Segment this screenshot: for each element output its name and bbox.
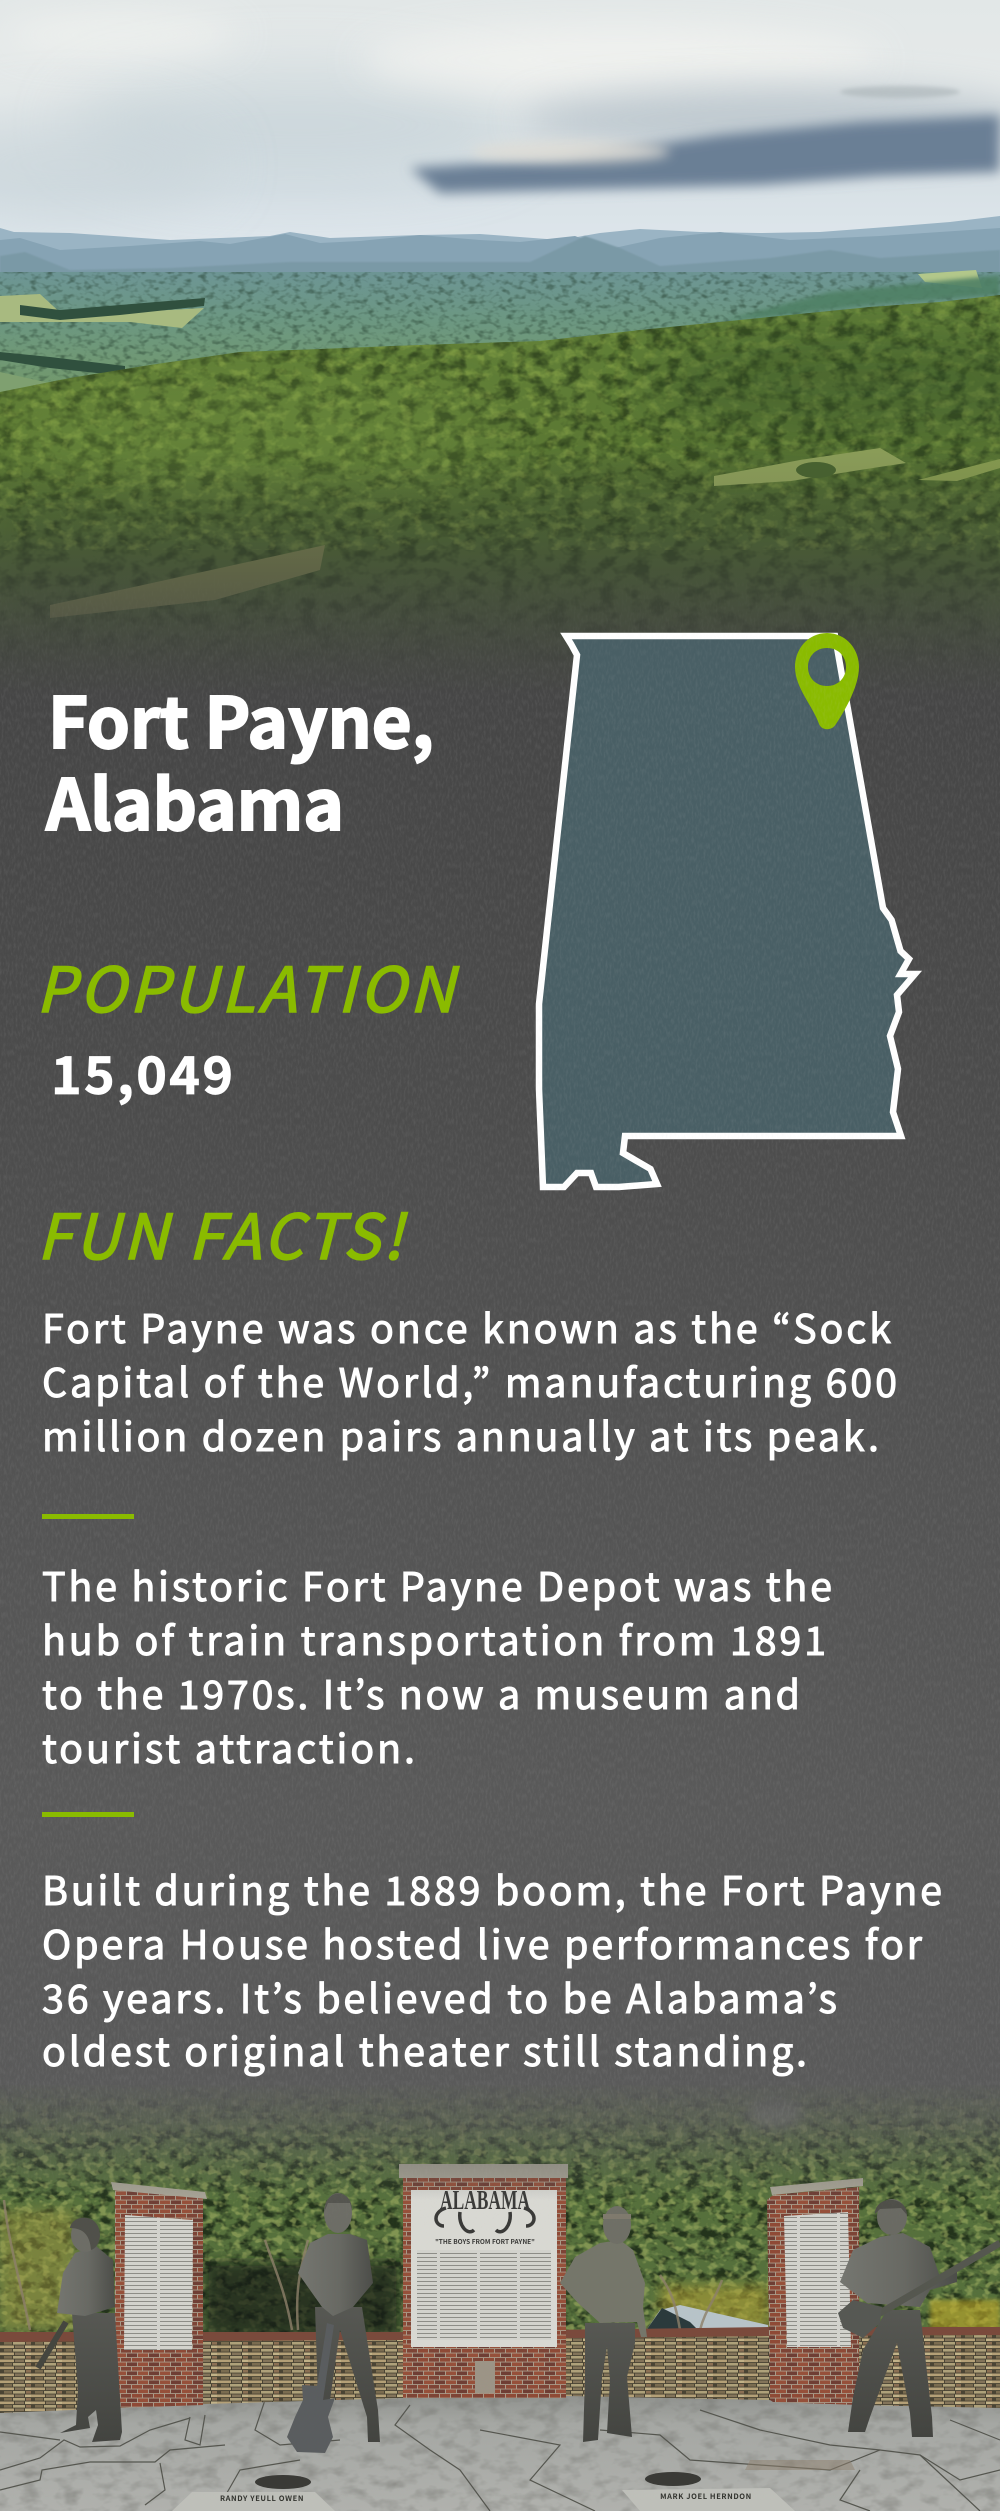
- statue: band member with bass guitar: [287, 2193, 380, 2453]
- valley forest and fields: [0, 270, 1000, 428]
- photo: Alabama band statues monument: [0, 2080, 1000, 2511]
- title: Alabama: [45, 750, 344, 851]
- statue: band member with headband: [560, 2206, 647, 2442]
- fact: sock capital: Fort Payne was once known as the “Sock: [42, 1298, 891, 1355]
- background: dark textured paper: [0, 560, 1000, 2240]
- heading: population: POPULATION: [36, 940, 459, 1030]
- fact: opera house: oldest original theater still standing.: [42, 2021, 807, 2078]
- meadows: [50, 448, 1000, 618]
- fact: sock capital: [42, 1298, 897, 1463]
- fade into dark background: [0, 2080, 1000, 2200]
- fade into dark background: [0, 450, 1000, 700]
- center brick pillar with Alabama plaque: [399, 2164, 568, 2398]
- icon: location pin: [795, 633, 859, 729]
- Alabama logo text: ALABAMA: [440, 2185, 530, 2215]
- heading: fun facts: FUN FACTS!: [37, 1187, 408, 1277]
- stone plaza: RANDY YEULL OWEN: [220, 2493, 304, 2504]
- distant mountains: [0, 216, 1000, 300]
- fact: opera house: Opera House hosted live performances for: [42, 1914, 923, 1971]
- fact: depot: [42, 1556, 832, 1775]
- fact: depot: tourist attraction.: [42, 1718, 415, 1775]
- sky with clouds: [0, 0, 1000, 240]
- stone plaza: MARK JOEL HERNDON: [660, 2491, 752, 2502]
- fact: sock capital: million dozen pairs annually at its peak.: [42, 1406, 879, 1463]
- forested hills: [0, 295, 1000, 642]
- population figure: 15,049: [51, 1034, 233, 1109]
- title: [45, 668, 434, 851]
- map: Alabama state outline: [539, 633, 915, 1187]
- fact: sock capital: Capital of the World,” manufacturing 600: [42, 1352, 897, 1409]
- stacked stone wall: [0, 2327, 1000, 2416]
- title: Fort Payne,: [48, 668, 434, 769]
- divider: [42, 1514, 134, 1519]
- stone plaza: [0, 2395, 1000, 2511]
- fact: opera house: 36 years. It’s believed to be Alabama’s: [42, 1968, 837, 2025]
- statue: band member with rifle-shaped prop, left: [38, 2218, 122, 2442]
- fact: opera house: [42, 1860, 942, 2078]
- fact: depot: hub of train transportation from 1891: [42, 1610, 826, 1667]
- fact: depot: to the 1970s. It’s now a museum and: [42, 1664, 800, 1721]
- photo: Fort Payne aerial landscape: [0, 0, 1000, 700]
- fact: depot: The historic Fort Payne Depot was the: [42, 1556, 832, 1613]
- fact: opera house: Built during the 1889 boom, the Fort Payne: [42, 1860, 942, 1917]
- tree backdrop: [0, 2085, 1000, 2345]
- left brick pillar with plaque: [111, 2182, 207, 2408]
- statue: guitarist on right: [838, 2199, 1000, 2437]
- right brick pillar with plaque: [767, 2178, 863, 2405]
- center brick pillar with Alabama plaque: "THE BOYS FROM FORT PAYNE": [435, 2236, 535, 2246]
- divider: [42, 1812, 134, 1817]
